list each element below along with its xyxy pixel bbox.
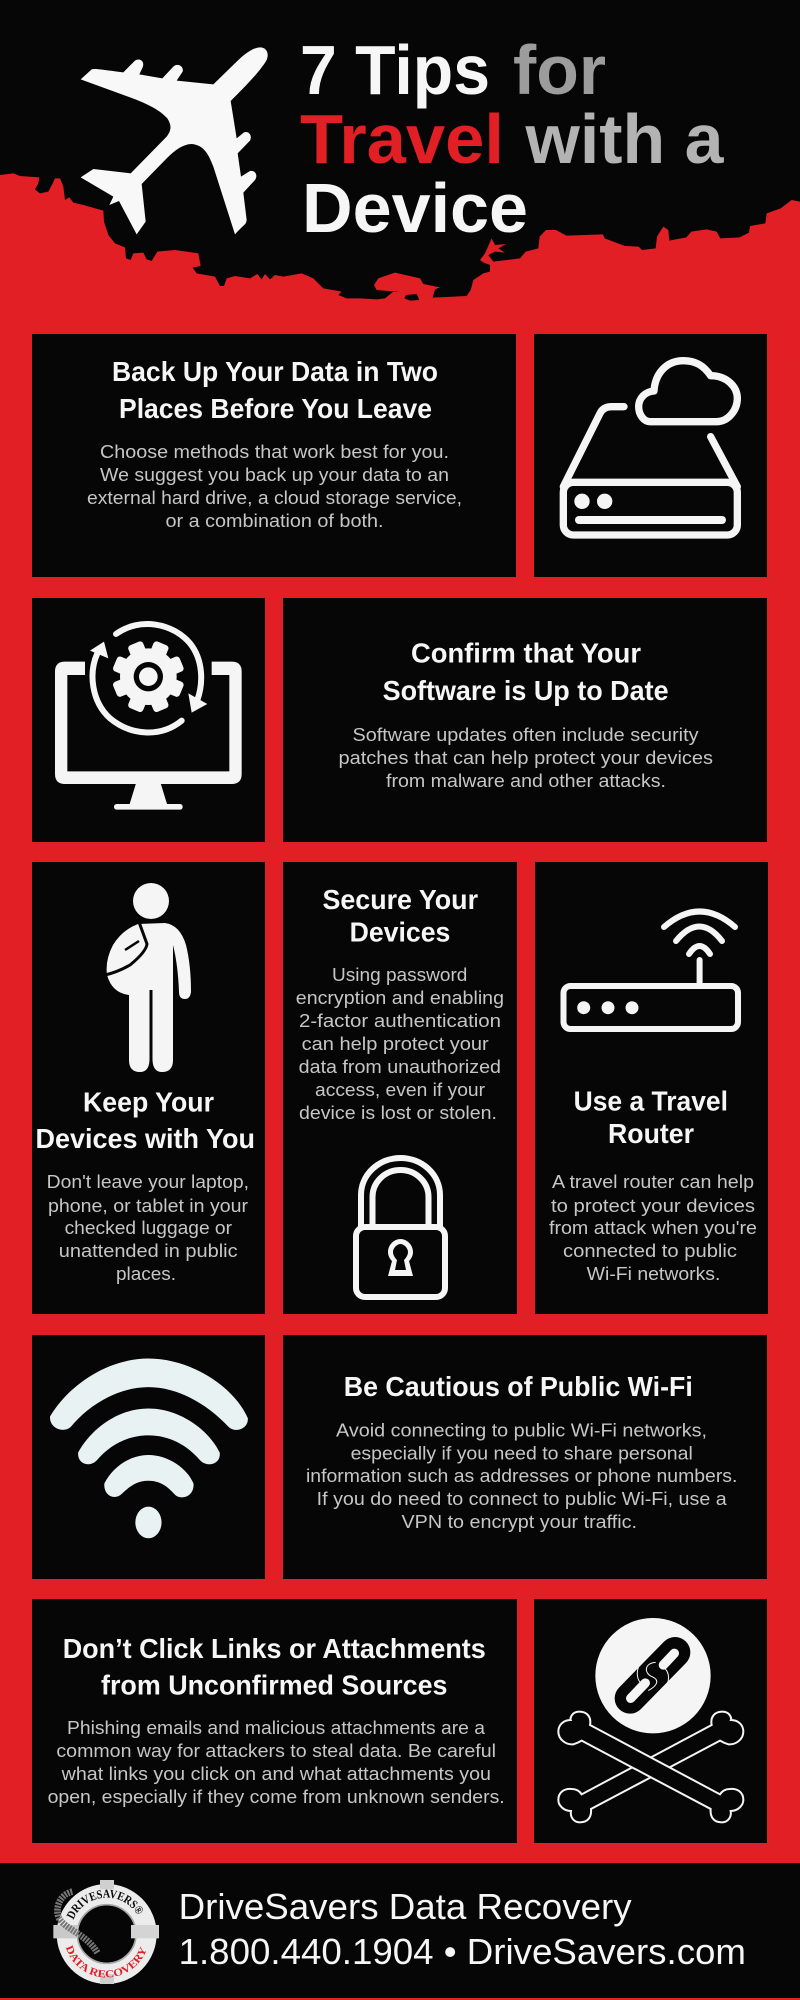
panel: confirm software text: from malware and other attacks. (386, 770, 666, 791)
icon: traveler with bag (105, 883, 191, 1072)
panel: wi-fi icon (32, 1335, 265, 1579)
title: with a (525, 100, 725, 178)
panel: use a travel router: from attack when you're (549, 1217, 757, 1238)
icon: DriveSavers life ring logo: DATA RECOVERY (66, 1944, 146, 1978)
footer band (0, 1863, 800, 1998)
panel: be cautious of public wi-fi text: especially if you need to share personal (351, 1442, 693, 1464)
panel: be cautious of public wi-fi text: Avoid connecting to public Wi-Fi networks, (336, 1419, 707, 1440)
icon: DriveSavers life ring logo: DRIVESAVERS® (66, 1890, 143, 1920)
panel: don't click links text: common way for attackers to steal data. Be careful (56, 1740, 496, 1761)
panel: use a travel router: to protect your devices (551, 1195, 755, 1216)
panel: back up your data text: Choose methods that work best for you. (100, 441, 449, 462)
panel: back up your data text: external hard drive, a cloud storage service, (87, 487, 462, 508)
panel: secure your devices: device is lost or stolen. (299, 1102, 497, 1123)
panel: secure your devices (283, 862, 517, 1314)
panel: use a travel router: Router (608, 1118, 694, 1149)
panel: don't click links text (32, 1599, 517, 1843)
panel: secure your devices: 2-factor authentication (299, 1010, 501, 1031)
panel: secure your devices: access, even if your (315, 1079, 485, 1100)
icon: DriveSavers life ring logo (53, 1880, 159, 1984)
panel: be cautious of public wi-fi text: Be Cautious of Public Wi-Fi (344, 1371, 693, 1402)
icon: padlock (356, 1158, 445, 1297)
panel: secure your devices: can help protect your (302, 1033, 489, 1054)
panel: keep your devices with you: places. (116, 1263, 176, 1284)
header: black ragged banner (0, 0, 800, 360)
panel: confirm software text: Software is Up to Date (383, 675, 669, 706)
panel: use a travel router: Use a Travel (574, 1086, 728, 1117)
panel: secure your devices: Secure Your (322, 884, 478, 915)
panel: secure your devices: Devices (350, 917, 450, 948)
panel: keep your devices with you: Devices with You (36, 1123, 255, 1154)
title (300, 31, 725, 247)
panel: use a travel router: connected to public (563, 1240, 737, 1261)
title: for (513, 31, 606, 109)
panel: confirm software text: Confirm that Your (411, 638, 641, 669)
panel: back up your data text: or a combination of both. (166, 510, 384, 531)
icon: airplane (81, 47, 268, 234)
panel: don't click links text: from Unconfirmed Sources (101, 1670, 448, 1701)
panel: use a travel router: A travel router can help (552, 1171, 754, 1192)
panel: don't click links text: Don’t Click Links or Attachments (63, 1633, 486, 1664)
footer band: DriveSavers Data Recovery (179, 1886, 632, 1927)
panel: use a travel router: Wi-Fi networks. (587, 1263, 720, 1284)
panel: secure your devices: encryption and enabling (296, 987, 504, 1008)
panel: confirm software text (283, 598, 767, 842)
panel: monitor with gear icon (32, 598, 265, 842)
footer band: 1.800.440.1904 • DriveSavers.com (179, 1931, 746, 1972)
panel: back up your data text: Places Before You Leave (119, 393, 432, 424)
panel: keep your devices with you: Don't leave your laptop, (47, 1171, 249, 1192)
panel: be cautious of public wi-fi text: VPN to encrypt your traffic. (402, 1511, 637, 1532)
panel: don't click links text: Phishing emails and malicious attachments are a (67, 1717, 486, 1738)
panel: confirm software text: patches that can help protect your devices (338, 747, 713, 768)
panel: don't click links text: open, especially if they come from unknown senders. (48, 1786, 505, 1807)
panel: be cautious of public wi-fi text: If you do need to connect to public Wi-Fi, use a (317, 1488, 727, 1509)
panel: keep your devices with you: unattended in public (59, 1240, 238, 1261)
panel: keep your devices with you: checked luggage or (65, 1217, 232, 1238)
title: 7 Tips (300, 31, 490, 109)
panel: keep your devices with you: phone, or tablet in your (48, 1195, 248, 1216)
panel: use a travel router (535, 862, 768, 1314)
panel: confirm software text: Software updates often include security (352, 724, 699, 745)
title: Travel (300, 100, 504, 178)
panel: secure your devices: data from unauthorized (299, 1056, 501, 1077)
panel: back up your data text (32, 334, 516, 577)
panel: keep your devices with you: Keep Your (83, 1087, 214, 1118)
panel: hard drive and cloud icon (534, 334, 767, 577)
panel: keep your devices with you (32, 862, 265, 1314)
panel: chain link and crossbones icon (534, 1599, 767, 1843)
icon: wireless router (564, 912, 738, 1029)
panel: back up your data text: Back Up Your Data in Two (112, 356, 438, 387)
panel: don't click links text: what links you click on and what attachments you (61, 1763, 491, 1784)
panel: be cautious of public wi-fi text (283, 1335, 767, 1579)
panel: secure your devices: Using password (332, 964, 467, 985)
title: Device (302, 169, 528, 247)
panel: back up your data text: We suggest you back up your data to an (100, 464, 449, 485)
panel: be cautious of public wi-fi text: information such as addresses or phone numbers. (306, 1465, 737, 1486)
